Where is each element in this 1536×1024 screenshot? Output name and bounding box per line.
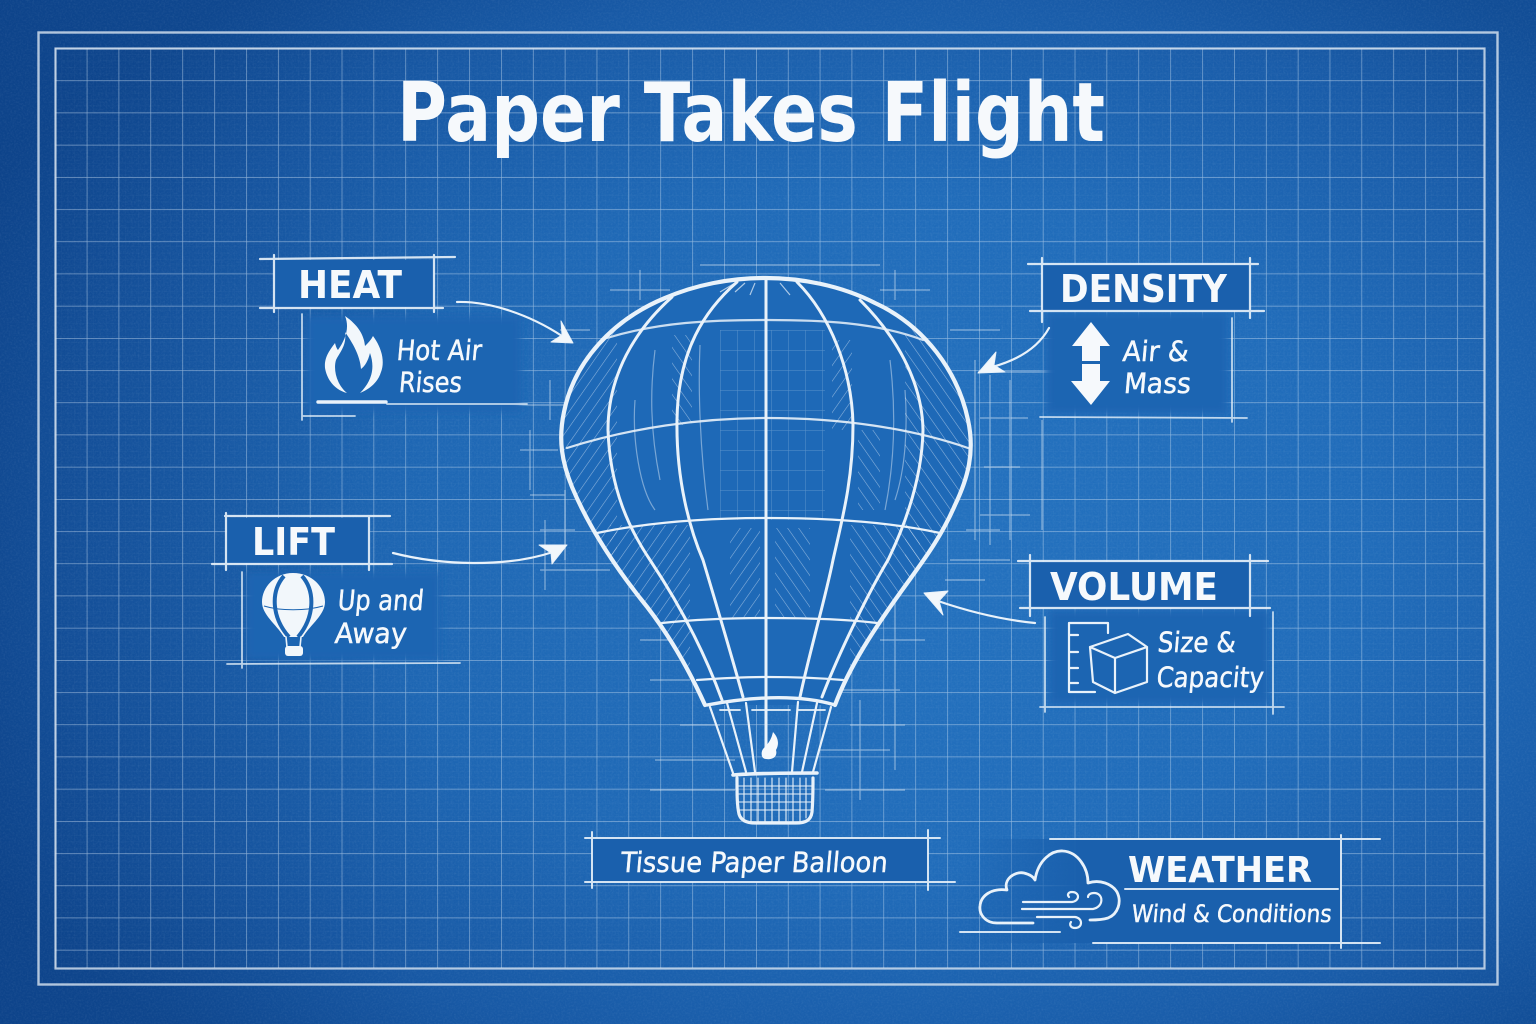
balloon envelope xyxy=(555,275,975,756)
balloon outline xyxy=(561,278,971,705)
panel: volume xyxy=(1018,555,1284,714)
arrow: heat to balloon xyxy=(457,302,573,343)
heat heading box xyxy=(260,255,455,312)
panel: lift xyxy=(212,513,460,668)
balloon meridians xyxy=(608,279,923,756)
balloon caption box: Tissue Paper Balloon xyxy=(618,846,889,879)
icon: cloud and wind xyxy=(980,851,1119,928)
volume text: Size & xyxy=(1156,626,1237,659)
arrow: volume to balloon xyxy=(924,591,1035,623)
density sub panel xyxy=(1040,312,1247,422)
lift text: Away xyxy=(334,617,408,650)
burner flame xyxy=(762,732,778,759)
heat heading box: HEAT xyxy=(298,263,402,307)
volume sub panel xyxy=(1040,610,1284,714)
weather box xyxy=(960,835,1380,948)
density text: Air & xyxy=(1121,335,1190,368)
volume text: Capacity xyxy=(1155,661,1265,694)
panel: density xyxy=(1028,258,1264,422)
arrow: lift to balloon xyxy=(393,545,567,564)
icon: flame xyxy=(318,316,386,402)
icon: up and down arrows xyxy=(1071,322,1110,405)
balloon neck and ropes xyxy=(707,698,835,773)
lift sub panel xyxy=(227,572,460,668)
balloon latitude bands xyxy=(567,320,968,680)
panel: weather xyxy=(960,835,1380,948)
heat text: Hot Air xyxy=(395,334,484,367)
arrow: density to balloon xyxy=(978,328,1049,373)
heat text: Rises xyxy=(398,366,463,399)
icon: ruler and cube xyxy=(1069,623,1147,693)
icon: mini balloon xyxy=(262,573,325,656)
weather heading: WEATHER xyxy=(1128,850,1312,891)
sketch construction lines around balloon xyxy=(510,265,1056,800)
density text: Mass xyxy=(1123,367,1192,400)
volume heading box xyxy=(1018,555,1270,616)
weather text: Wind & Conditions xyxy=(1130,900,1333,928)
density heading box xyxy=(1028,258,1264,322)
lift heading box xyxy=(212,513,392,570)
density heading box: DENSITY xyxy=(1060,267,1227,311)
balloon illustration xyxy=(555,275,975,823)
basket xyxy=(733,773,817,823)
title: Paper Takes Flight xyxy=(397,66,1105,161)
lift text: Up and xyxy=(336,584,425,617)
panel: heat xyxy=(260,255,527,420)
heat sub panel xyxy=(302,314,527,420)
lift heading box: LIFT xyxy=(252,520,335,564)
balloon caption box xyxy=(585,830,955,890)
volume heading box: VOLUME xyxy=(1050,565,1218,609)
